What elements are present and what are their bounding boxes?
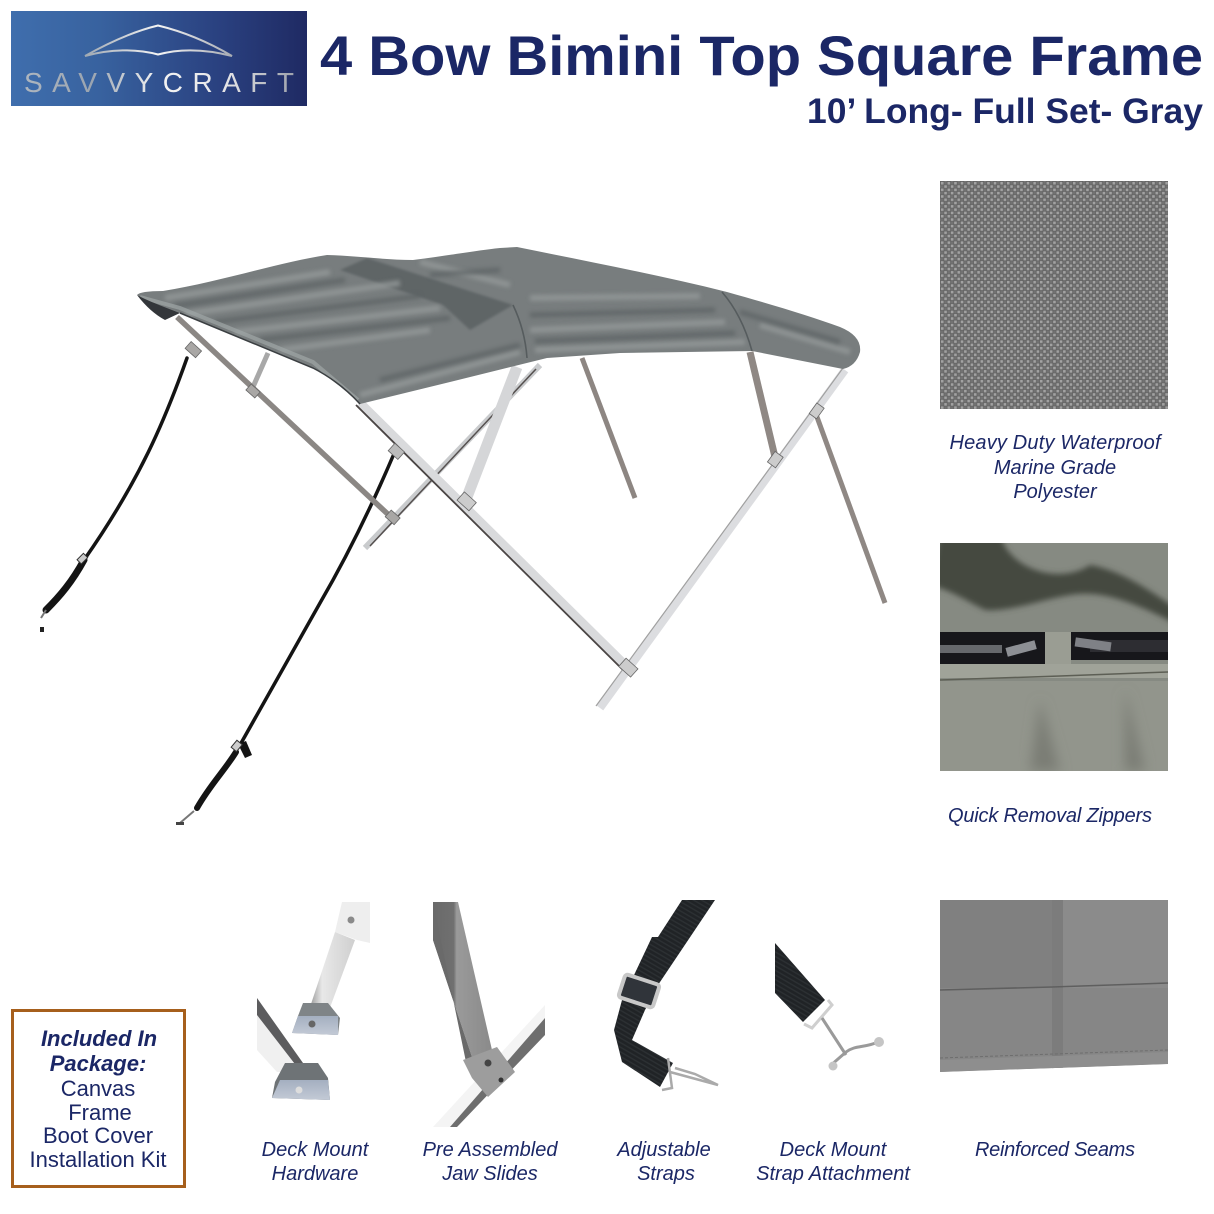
icon: logo canopy arc: [85, 26, 232, 56]
callout: included in package: Installation Kit: [30, 1147, 166, 1172]
title: 4 Bow Bimini Top Square Frame: [320, 24, 1203, 87]
callout: included in package: Included In: [41, 1026, 157, 1051]
caption: deck mount hardware: Hardware: [272, 1163, 358, 1185]
caption: adjustable straps: Straps: [637, 1163, 695, 1185]
callout: included in package: [12, 1010, 184, 1186]
caption: jaw slides: Pre Assembled: [423, 1139, 558, 1161]
callout: included in package: Package:: [50, 1051, 146, 1076]
logo: [11, 11, 307, 106]
caption: strap attachment: Strap Attachment: [756, 1163, 911, 1185]
photo: adjustable strap: [614, 900, 718, 1090]
callout: included in package: Canvas: [61, 1076, 135, 1101]
callout: included in package: Frame: [68, 1100, 132, 1125]
logo wordmark: SAVVYCRAFT: [24, 67, 294, 98]
photo: fabric weave swatch: [940, 181, 1168, 409]
caption: polyester: Polyester: [1013, 481, 1098, 503]
photo: jaw slides: [433, 902, 545, 1127]
caption: deck mount hardware: Deck Mount: [262, 1139, 370, 1161]
canopy shading: [340, 258, 513, 330]
caption: strap attachment: Deck Mount: [780, 1139, 888, 1161]
caption: polyester: Marine Grade: [994, 457, 1116, 479]
photo: zippers: [940, 543, 1168, 771]
caption: zippers: Quick Removal Zippers: [948, 805, 1152, 827]
rear frame bars: [177, 317, 885, 708]
straps: [46, 358, 393, 808]
photo: deck mount hardware: [257, 902, 370, 1100]
photo: reinforced seams: [940, 900, 1168, 1072]
callout: included in package: Boot Cover: [43, 1123, 153, 1148]
caption: adjustable straps: Adjustable: [616, 1139, 711, 1161]
caption: polyester: Heavy Duty Waterproof: [950, 432, 1163, 454]
subtitle: 10’ Long- Full Set- Gray: [807, 92, 1204, 131]
photo: deck mount strap attachment: [775, 943, 884, 1070]
canopy: [137, 295, 180, 320]
caption: jaw slides: Jaw Slides: [441, 1163, 538, 1185]
frame brackets: [185, 342, 824, 677]
main product image: bimini top: [40, 247, 885, 825]
caption: reinforced seams: Reinforced Seams: [975, 1139, 1135, 1161]
